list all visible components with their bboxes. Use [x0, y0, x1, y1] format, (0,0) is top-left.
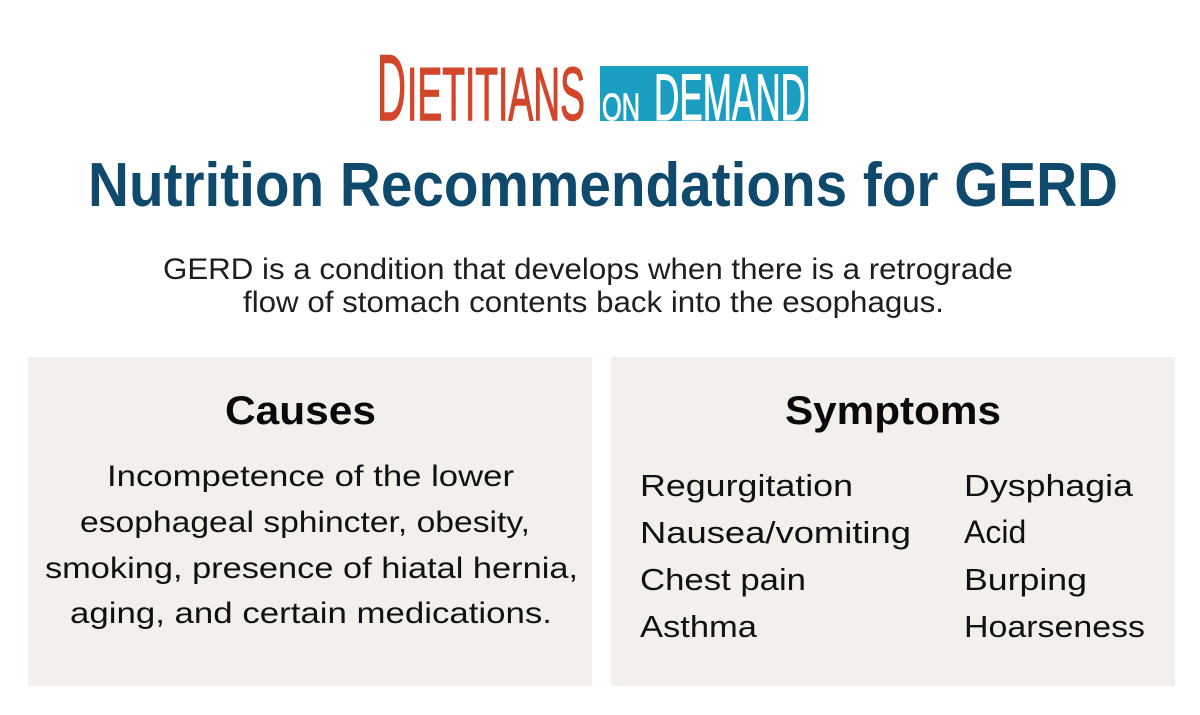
causes heading: Causes — [225, 389, 376, 433]
symptoms list right: Hoarseness — [964, 609, 1145, 644]
causes text — [45, 460, 578, 630]
symptoms list right: Acid — [964, 514, 1026, 550]
symptoms list left — [640, 468, 911, 644]
logo: IETITIANS — [407, 52, 585, 136]
symptoms list left: Chest pain — [640, 562, 806, 597]
logo: on Demand box: ON — [602, 87, 640, 129]
title: Nutrition Recommendations for GERD — [88, 151, 1118, 220]
causes text: smoking, presence of hiatal hernia, — [45, 552, 578, 585]
logo — [377, 35, 808, 140]
symptoms list left: Nausea/vomiting — [640, 515, 911, 550]
intro text — [163, 253, 1013, 319]
symptoms heading: Symptoms — [785, 389, 1001, 433]
causes text: esophageal sphincter, obesity, — [80, 506, 530, 539]
symptoms list right — [964, 468, 1145, 644]
logo: Dietitians — [377, 35, 585, 140]
symptoms list left: Regurgitation — [640, 468, 853, 503]
symptoms list left: Asthma — [640, 609, 758, 644]
panel: causes — [28, 357, 592, 686]
causes text: aging, and certain medications. — [70, 597, 552, 630]
symptoms list right: Dysphagia — [964, 468, 1134, 503]
logo: on Demand box: DEMAND — [654, 60, 806, 134]
symptoms list right: Burping — [964, 562, 1087, 597]
intro text: flow of stomach contents back into the esophagus. — [243, 286, 944, 319]
intro text: GERD is a condition that develops when there is a retrograde — [163, 253, 1013, 286]
logo: Dietitians: D — [377, 35, 406, 140]
panel: symptoms — [611, 357, 1175, 686]
logo: on Demand box — [600, 60, 808, 134]
causes text: Incompetence of the lower — [107, 460, 514, 493]
